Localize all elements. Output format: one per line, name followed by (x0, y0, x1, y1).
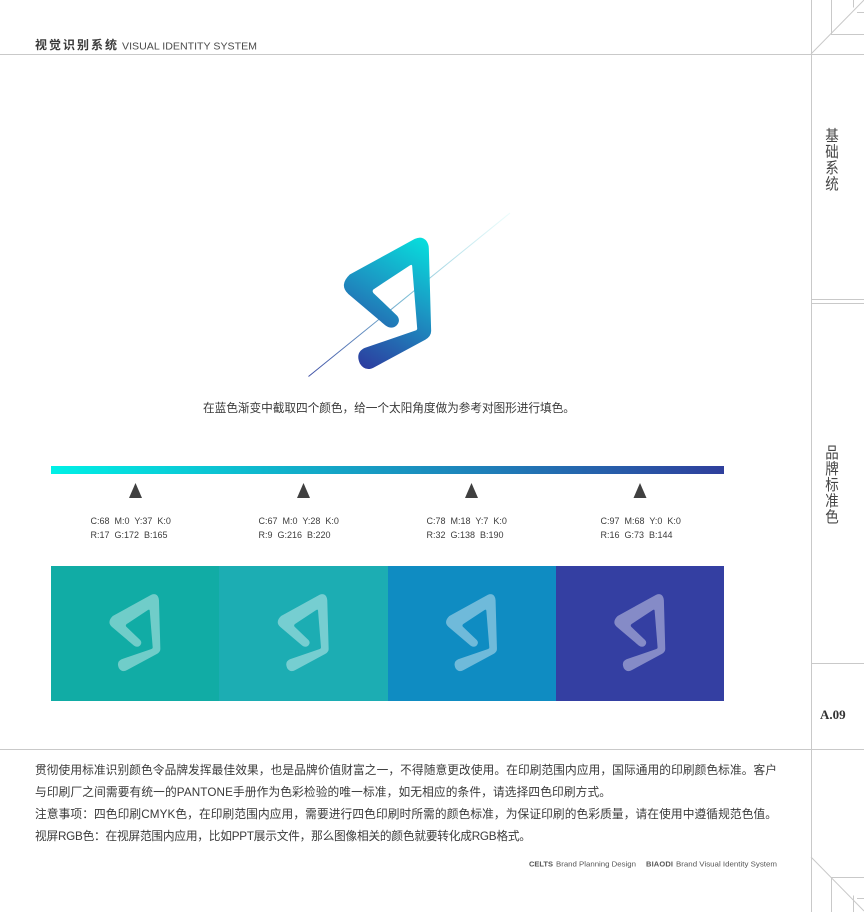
side label: brand standard colour: 牌 (825, 460, 839, 478)
side label: brand standard colour (825, 444, 839, 526)
side label: brand standard colour: 品 (825, 444, 839, 462)
swatch logo 4 (614, 594, 665, 671)
footer credits: CELTS (529, 860, 553, 868)
caption: 在蓝色渐变中截取四个颜色，给一个太阳角度做为参考对图形进行填色。 (203, 401, 575, 415)
colour swatch 4 (556, 566, 724, 701)
swatch logo 2 (278, 594, 329, 671)
body text: 与印刷厂之间需要有统一的PANTONE手册作为色彩检验的唯一标准，如无相应的条件，请选择四色印刷方式。 (35, 785, 611, 799)
colour values: C:97 M:68 Y:0 K:0 (600, 516, 681, 526)
footer credits: Brand Visual Identity System (676, 860, 777, 868)
colour values: R:17 G:172 B:165 (90, 530, 168, 540)
header title: VISUAL IDENTITY SYSTEM (122, 40, 257, 52)
colour swatch 1 (51, 566, 219, 701)
header title: 视觉识别系统 (35, 37, 117, 52)
footer credits: Brand Planning Design (556, 860, 636, 868)
side label: basic system: 础 (825, 143, 839, 161)
header title (35, 37, 257, 52)
body text: 贯彻使用标准识别颜色令品牌发挥最佳效果，也是品牌价值财富之一，不得随意更改使用。在印刷范围内应用，国际通用的印刷颜色标准。客户 (35, 763, 777, 777)
body text (35, 763, 777, 843)
colour values: C:67 M:0 Y:28 K:0 (258, 516, 339, 526)
colour swatch 2 (219, 566, 388, 701)
colour values: R:9 G:216 B:220 (258, 530, 331, 540)
colour marker triangles (129, 483, 646, 498)
side label: brand standard colour: 标 (825, 476, 839, 494)
colour values: C:78 M:18 Y:7 K:0 (426, 516, 507, 526)
gradient bar (51, 466, 724, 474)
side label: basic system: 系 (825, 159, 839, 177)
main gradient logo (344, 238, 431, 369)
swatch logo 1 (109, 594, 160, 671)
colour values: R:32 G:138 B:190 (426, 530, 504, 540)
footer credits (529, 860, 777, 868)
colour values: C:68 M:0 Y:37 K:0 (90, 516, 171, 526)
colour swatch 3 (388, 566, 556, 701)
diagonal sun line (308, 213, 510, 376)
footer credits: BIAODI (646, 860, 673, 868)
colour values: R:16 G:73 B:144 (600, 530, 673, 540)
colour values (90, 516, 681, 540)
body text: 视屏RGB色：在视屏范围内应用，比如PPT展示文件，那么图像相关的颜色就要转化成RGB格式。 (35, 829, 531, 843)
swatch logo 3 (446, 594, 497, 671)
side label: basic system: 基 (825, 127, 839, 145)
side label: brand standard colour: 准 (825, 492, 839, 510)
side label: basic system: 统 (825, 175, 839, 193)
side label: basic system (825, 127, 839, 193)
page number: A.09 (820, 707, 846, 722)
side label: brand standard colour: 色 (825, 508, 839, 526)
body text: 注意事项：四色印刷CMYK色，在印刷范围内应用，需要进行四色印刷时所需的颜色标准，为保证印刷的色彩质量，请在使用中遵循规范色值。 (35, 807, 777, 821)
